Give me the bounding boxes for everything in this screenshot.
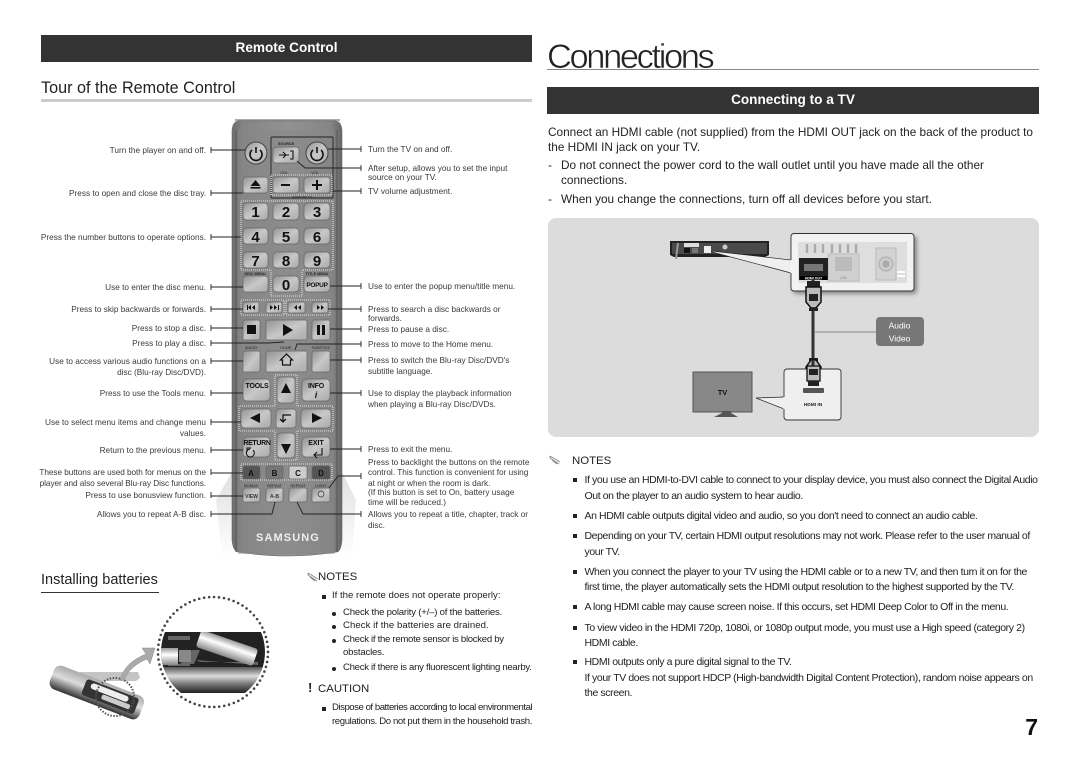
TV: TV <box>718 388 727 397</box>
notes for connecting to a TV: NOTES <box>572 455 611 467</box>
small dotted circle <box>96 678 134 716</box>
remote control illustration with leader lines <box>210 120 362 556</box>
left callout labels for remote: Press to play a disc. <box>132 339 206 348</box>
right callout labels for remote: source on your TV. <box>368 173 437 182</box>
left callout labels for remote: disc (Blu-ray Disc/DVD). <box>117 368 206 377</box>
dotted button groups <box>239 175 333 480</box>
button labels: SAMSUNG <box>256 532 320 544</box>
intro text block: the HDMI IN jack on your TV. <box>548 140 700 154</box>
heading: Installing batteries: Installing batteries <box>41 572 158 588</box>
button labels: POPUP <box>306 282 329 289</box>
right callout labels for remote: Press to move to the Home menu. <box>368 340 493 349</box>
battery installation illustration <box>50 596 270 720</box>
intro text block: - <box>548 192 552 206</box>
button labels: C <box>295 469 301 478</box>
notes and caution for batteries: NOTES <box>318 571 357 583</box>
right callout labels for remote: control. This function is convenient for using <box>368 468 528 477</box>
notes for connecting to a TV: first time, the player automatically sets the HDMI output resolution to the highest supported by the TV. <box>584 581 1014 593</box>
intro text block: When you change the connections, turn off all devices before you start. <box>561 192 932 206</box>
button labels: LIGHT <box>315 484 327 488</box>
left callout labels for remote: player and also several Blu-ray Disc functions. <box>40 479 206 488</box>
right callout labels for remote <box>368 145 530 530</box>
button numerals: 6 <box>313 229 321 246</box>
left callout labels for remote: Use to select menu items and change menu <box>45 418 206 427</box>
button labels: D <box>318 469 324 478</box>
button numerals: 4 <box>251 229 260 246</box>
left callout labels for remote: Press to use the Tools menu. <box>100 389 206 398</box>
title: Connections: Connections <box>547 38 712 76</box>
notes and caution for batteries: CAUTION <box>318 683 369 695</box>
notes for connecting to a TV: A long HDMI cable may cause screen noise. If this occurs, set HDMI Deep Color to Off in the menu. <box>584 601 1008 613</box>
left callout labels for remote: Press to stop a disc. <box>132 324 206 333</box>
left callout labels for remote: Allows you to repeat A-B disc. <box>97 510 206 519</box>
callout: player jacks: HDMI OUT <box>805 276 823 280</box>
notes for connecting to a TV: HDMI outputs only a pure digital signal to the TV. <box>584 656 792 668</box>
button labels: SOURCE <box>278 142 295 146</box>
button numerals: 3 <box>313 204 321 221</box>
notes and caution for batteries: If the remote does not operate properly: <box>332 590 501 601</box>
left callout labels for remote: Press to skip backwards or forwards. <box>71 305 206 314</box>
notes for connecting to a TV: To view video in the HDMI 720p, 1080i, or 1080p output mode, you must use a High speed (category 2) <box>584 622 1025 634</box>
notes and caution for batteries: ! <box>308 680 312 695</box>
right callout labels for remote: subtitle language. <box>368 367 433 376</box>
TV <box>693 372 752 417</box>
left callout labels for remote <box>39 146 206 519</box>
button labels: TITLE MENU <box>306 272 329 276</box>
notes for connecting to a TV: your TV. <box>584 546 620 558</box>
magnified circle <box>158 597 268 707</box>
right callout labels for remote: Press to switch the Blu-ray Disc/DVD's <box>368 356 509 365</box>
remote body <box>216 120 356 557</box>
right callout labels for remote: Press to backlight the buttons on the remote <box>368 458 529 467</box>
button labels: VOL <box>280 171 288 175</box>
left callout labels for remote: Press the number buttons to operate options. <box>41 233 206 242</box>
intro text block: Do not connect the power cord to the wall outlet until you have made all the other <box>561 158 984 172</box>
button labels: VOL <box>311 171 319 175</box>
callout: player jacks: LAN <box>840 276 847 280</box>
Audio Video line and label: Video <box>889 334 911 344</box>
notes and caution for batteries <box>308 571 532 727</box>
icon: notes pencil <box>308 572 318 582</box>
right callout labels for remote: Press to exit the menu. <box>368 445 452 454</box>
notes for connecting to a TV: When you connect the player to your TV using the HDMI cable or to a new TV, and then turn it on for the <box>584 566 1027 578</box>
button numerals: 5 <box>282 229 290 246</box>
left callout labels for remote: Press to open and close the disc tray. <box>69 189 206 198</box>
intro text block <box>548 125 1033 206</box>
right callout labels for remote: Allows you to repeat a title, chapter, track or <box>368 510 528 519</box>
notes for connecting to a TV <box>550 455 1038 699</box>
heading bar: Remote Control <box>41 35 532 62</box>
notes for connecting to a TV: An HDMI cable outputs digital video and audio, so you don't need to connect an audio cable. <box>584 510 977 522</box>
left callout labels for remote: Use to enter the disc menu. <box>105 283 206 292</box>
notes for connecting to a TV: Depending on your TV, certain HDMI output resolutions may not work. Please refer to the user manual of <box>584 530 1030 542</box>
right callout labels for remote: Press to pause a disc. <box>368 325 449 334</box>
icon: notes pencil <box>550 456 560 464</box>
button labels: TOOLS <box>246 383 269 390</box>
notes for connecting to a TV: HDMI cable. <box>584 637 638 649</box>
right callout labels for remote: Turn the TV on and off. <box>368 145 452 154</box>
button labels: RETURN <box>243 440 271 447</box>
right callout labels for remote: Press to search a disc backwards or <box>368 305 501 314</box>
intro text block: connections. <box>561 173 627 187</box>
button numerals: 1 <box>251 204 260 221</box>
notes and caution for batteries: obstacles. <box>343 647 384 658</box>
left callout labels for remote: These buttons are used both for menus on the <box>39 468 206 477</box>
left callout labels for remote: Return to the previous menu. <box>100 446 206 455</box>
button labels: VIEW <box>245 494 258 500</box>
intro text block: Connect an HDMI cable (not supplied) from the HDMI OUT jack on the back of the product to <box>548 125 1033 139</box>
callout: player jacks <box>712 234 917 294</box>
title: Connections <box>547 35 1039 70</box>
right leader lines <box>295 146 361 517</box>
right callout labels for remote: Use to enter the popup menu/title menu. <box>368 282 515 291</box>
left callout labels for remote: Turn the player on and off. <box>110 146 206 155</box>
notes for connecting to a TV: If you use an HDMI-to-DVI cable to connect to your display device, you must also connect the Digital Audio <box>584 474 1038 486</box>
button labels: A <box>248 469 254 478</box>
button labels: REPEAT <box>267 484 283 488</box>
button labels: BONUS <box>244 484 258 488</box>
button labels: INFO <box>308 383 325 390</box>
right callout labels for remote: (If this button is set to On, battery usage <box>368 488 514 497</box>
button numerals: 2 <box>282 204 290 221</box>
notes and caution for batteries: Dispose of batteries according to local environmental <box>332 702 532 713</box>
right callout labels for remote: at night or when the room is dark. <box>368 479 490 488</box>
heading bar: Connecting to a TV: Connecting to a TV <box>731 92 855 107</box>
button labels: EXIT <box>308 440 325 447</box>
button labels: REPEAT <box>291 484 306 488</box>
button numerals: 7 <box>251 253 260 270</box>
callout: HDMI IN <box>756 360 841 420</box>
notes and caution for batteries: Check if there is any fluorescent lighting nearby. <box>343 662 532 673</box>
right callout labels for remote: Use to display the playback information <box>368 389 512 398</box>
button numerals: 9 <box>313 253 321 270</box>
button labels: B <box>272 469 278 478</box>
panel: HDMI connection diagram <box>548 218 1039 437</box>
buttons <box>241 142 331 502</box>
button glyphs <box>247 147 325 454</box>
button labels: AUDIO <box>245 346 257 350</box>
notes and caution for batteries: Check if the remote sensor is blocked by <box>343 634 504 645</box>
arrow <box>120 648 155 680</box>
Audio Video line and label <box>815 317 924 346</box>
player rear <box>670 241 769 259</box>
button labels <box>243 142 331 544</box>
button labels: DISC MENU <box>244 272 266 276</box>
button labels: SUBTITLE <box>312 346 331 350</box>
notes and caution for batteries: regulations. Do not put them in the household trash. <box>332 716 532 727</box>
right callout labels for remote: when playing a Blu-ray Disc/DVDs. <box>368 400 496 409</box>
heading bar: Remote Control: Remote Control <box>236 40 337 55</box>
left leader lines <box>211 147 284 517</box>
right callout labels for remote: TV volume adjustment. <box>368 187 452 196</box>
heading: Tour of the Remote Control <box>41 79 532 102</box>
left callout labels for remote: values. <box>180 429 206 438</box>
right callout labels for remote: time will be reduced.) <box>368 498 446 507</box>
samsung tv control frame <box>271 137 333 198</box>
button labels: A-B <box>270 494 279 500</box>
callout: HDMI IN: HDMI IN <box>804 402 823 408</box>
button labels: i <box>315 390 318 400</box>
button numerals <box>251 204 321 294</box>
HDMI cable with plugs <box>806 279 821 380</box>
right callout labels for remote: disc. <box>368 521 385 530</box>
intro text block: - <box>548 158 552 172</box>
notes for connecting to a TV: the screen. <box>584 687 632 699</box>
notes and caution for batteries: Check if the batteries are drained. <box>343 620 489 631</box>
right callout labels for remote: forwards. <box>368 314 402 323</box>
left callout labels for remote: Press to use bonusview function. <box>85 491 206 500</box>
heading bar: Connecting to a TV <box>547 87 1039 114</box>
right callout labels for remote: After setup, allows you to set the input <box>368 164 507 173</box>
notes for connecting to a TV: If your TV does not support HDCP (High-bandwidth Digital Content Protection), random noise appears on <box>584 672 1033 684</box>
small remote <box>48 664 146 721</box>
button labels: SAMSUNG TV <box>292 195 312 199</box>
button numerals: 8 <box>282 253 290 270</box>
button numerals: 0 <box>282 277 290 294</box>
left callout labels for remote: Use to access various audio functions on a <box>49 357 206 366</box>
page number: 7 <box>1025 714 1038 740</box>
notes and caution for batteries: Check the polarity (+/–) of the batteries. <box>343 607 502 618</box>
button labels: HOME <box>280 346 292 350</box>
notes for connecting to a TV: Out on the player to an audio system to hear audio. <box>584 490 803 502</box>
heading: Tour of the Remote Control: Tour of the Remote Control <box>41 79 235 97</box>
Audio Video line and label: Audio <box>889 320 911 330</box>
